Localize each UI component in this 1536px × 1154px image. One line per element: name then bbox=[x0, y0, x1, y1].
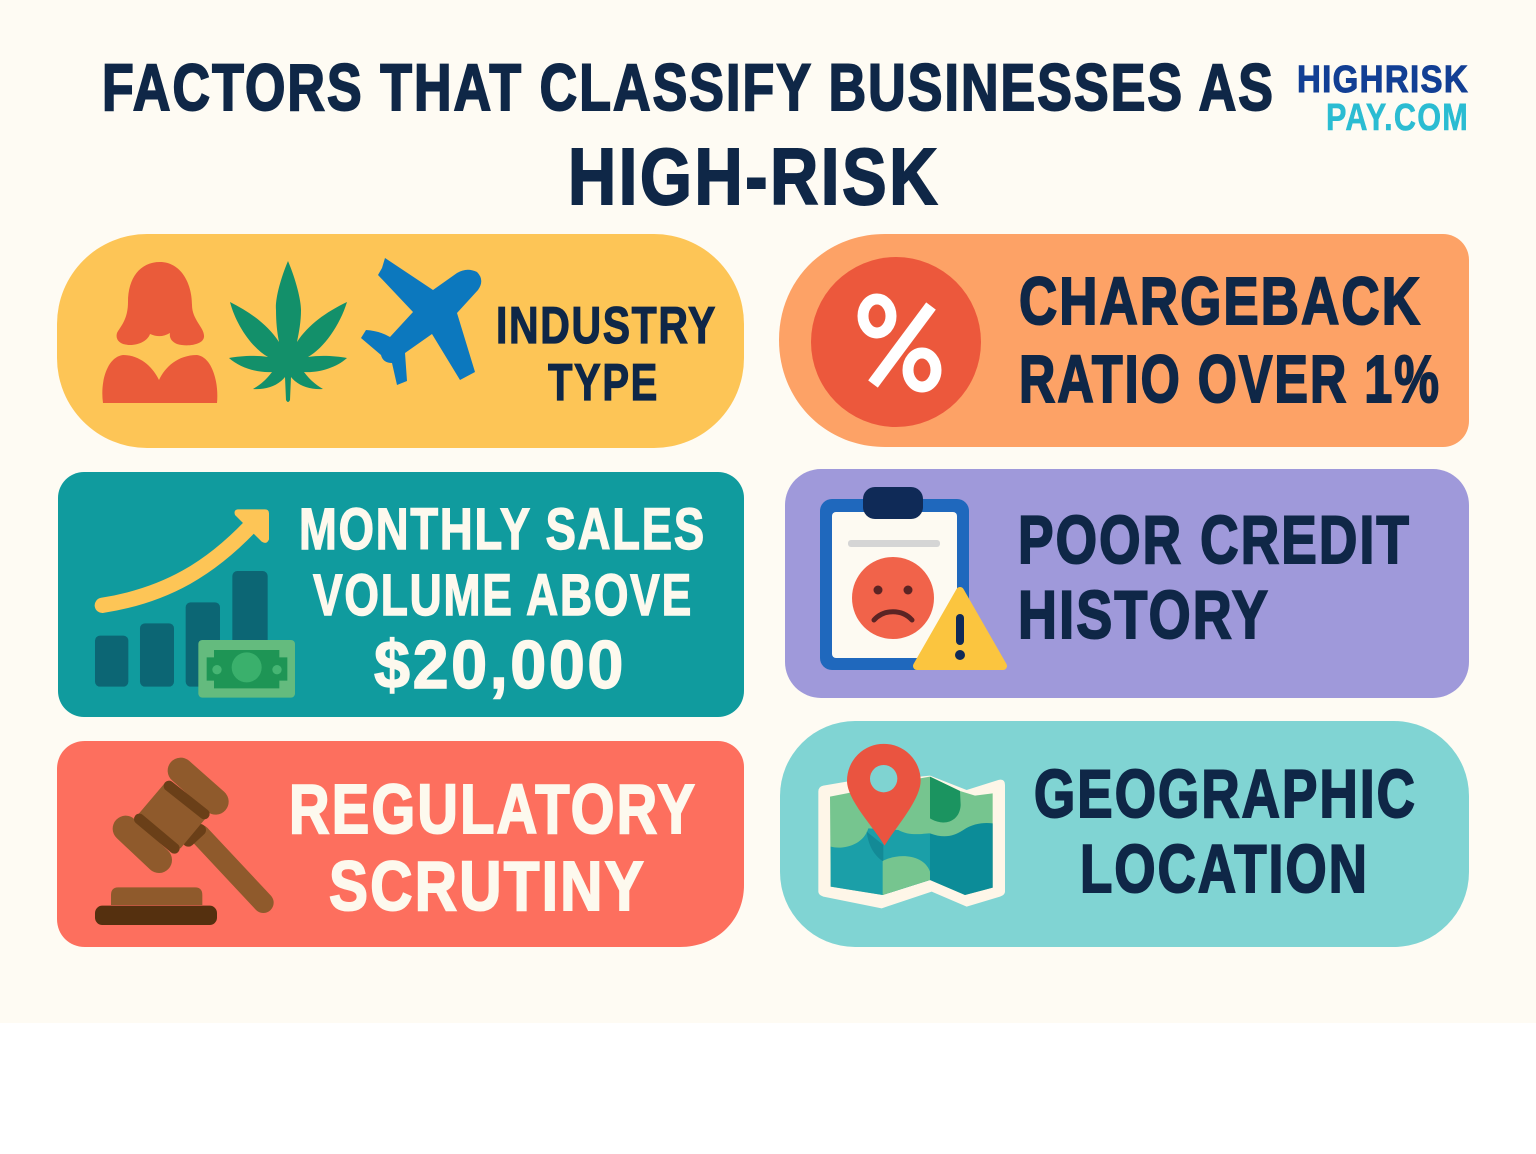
panel: geographic location bbox=[780, 721, 1469, 947]
logo: HIGHRISK bbox=[1297, 59, 1469, 101]
panel: regulatory scrutiny bbox=[57, 741, 744, 947]
label: monthly sales: $20,000 bbox=[374, 627, 626, 703]
panel: chargeback ratio bbox=[779, 234, 1469, 447]
label: industry type bbox=[496, 297, 717, 412]
panel: industry type bbox=[57, 234, 744, 448]
icon: cannabis leaf bbox=[229, 261, 347, 402]
label: poor credit bbox=[1018, 502, 1411, 653]
icon: gavel bbox=[95, 771, 263, 925]
label: monthly sales: MONTHLY SALES bbox=[299, 497, 706, 562]
label: geographic bbox=[1034, 756, 1417, 907]
logo: PAY.COM bbox=[1326, 97, 1469, 139]
label: poor credit: POOR CREDIT bbox=[1018, 502, 1411, 578]
icon: map bbox=[818, 744, 1005, 908]
label: chargeback bbox=[1019, 264, 1441, 417]
panel: poor credit bbox=[785, 469, 1469, 698]
title: HIGH-RISK bbox=[568, 132, 940, 221]
logo bbox=[1297, 59, 1469, 139]
label: industry type: TYPE bbox=[548, 354, 659, 412]
label: poor credit: HISTORY bbox=[1018, 577, 1270, 653]
label: monthly sales bbox=[299, 497, 706, 703]
icon: woman bbox=[102, 262, 217, 403]
label: regulatory: SCRUTINY bbox=[329, 847, 646, 925]
icon: airplane bbox=[361, 258, 481, 385]
icon: growth chart bbox=[95, 509, 295, 698]
label: monthly sales: VOLUME ABOVE bbox=[313, 563, 693, 628]
icon: percent bbox=[811, 257, 981, 427]
icon: clipboard bbox=[820, 487, 1003, 670]
title bbox=[102, 50, 1275, 221]
panel: monthly sales bbox=[58, 472, 744, 717]
label: geographic: LOCATION bbox=[1080, 831, 1369, 907]
label: geographic: GEOGRAPHIC bbox=[1034, 756, 1417, 832]
label: chargeback: CHARGEBACK bbox=[1019, 264, 1422, 339]
label: industry type: INDUSTRY bbox=[496, 297, 717, 355]
label: regulatory bbox=[289, 770, 697, 925]
label: regulatory: REGULATORY bbox=[289, 770, 697, 848]
